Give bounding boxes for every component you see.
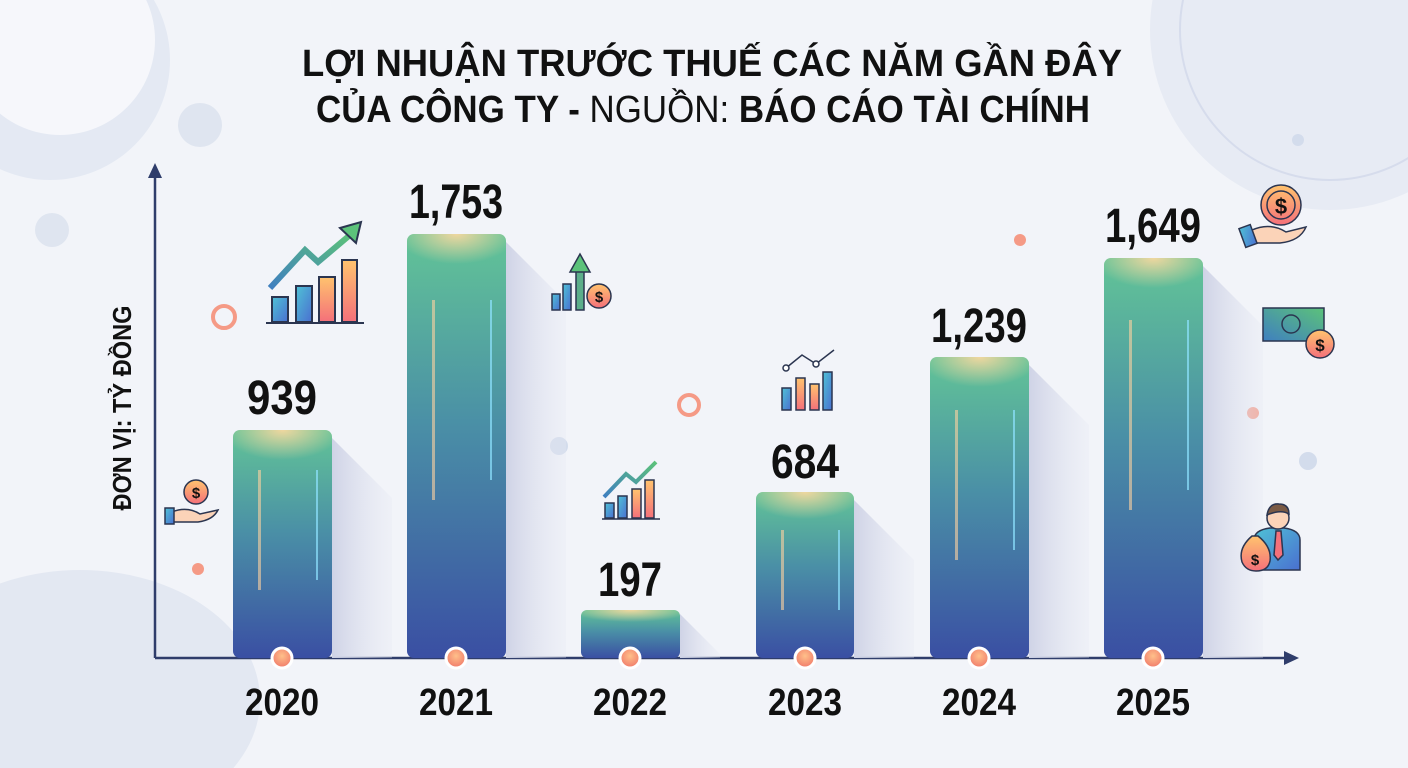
bar 2023: 684 — [771, 436, 839, 489]
icon: chart with coin — [552, 254, 611, 310]
icon: banknote with coin — [1263, 308, 1334, 358]
bar 2021: 2021 — [419, 682, 493, 724]
title: LỢI NHUẬN TRƯỚC THUẾ CÁC NĂM GẦN ĐÂY — [302, 41, 1122, 85]
axes — [148, 163, 1299, 665]
icon: hand with coin right — [1239, 185, 1306, 247]
bar 2021 — [407, 176, 566, 724]
y-axis label: ĐƠN VỊ: TỶ ĐỒNG — [107, 306, 137, 510]
bar 2025 — [1104, 200, 1263, 724]
bar 2025: 1,649 — [1105, 200, 1201, 253]
icon: growth chart large — [266, 222, 364, 323]
bar 2024: 2024 — [942, 682, 1016, 724]
bar 2020: 2020 — [245, 682, 319, 724]
bar 2020: 939 — [247, 372, 317, 425]
icon: hand with coin left: $ — [192, 485, 201, 502]
icon: businessman with money bag — [1241, 504, 1300, 571]
bar 2022: 197 — [598, 554, 662, 607]
bar 2024 — [930, 300, 1089, 724]
bar 2024: 1,239 — [931, 300, 1027, 353]
icon: hand with coin right: $ — [1275, 194, 1287, 219]
bar 2020 — [233, 372, 392, 724]
icon: chart with coin: $ — [595, 289, 604, 306]
bar 2022 — [581, 554, 720, 724]
bar 2022: 2022 — [593, 682, 667, 724]
icon: small growth chart — [602, 462, 660, 519]
bar 2021: 1,753 — [409, 176, 503, 229]
bar 2023: 2023 — [768, 682, 842, 724]
icon: hand with coin left — [165, 480, 218, 524]
bar 2025: 2025 — [1116, 682, 1190, 724]
icon: analytics chart — [782, 350, 834, 410]
title: CỦA CÔNG TY - NGUỒN: BÁO CÁO TÀI CHÍNH — [316, 86, 1090, 131]
icon: banknote with coin: $ — [1315, 336, 1325, 355]
bar 2023 — [756, 436, 914, 724]
icon: businessman with money bag: $ — [1251, 552, 1260, 569]
title — [302, 41, 1122, 131]
